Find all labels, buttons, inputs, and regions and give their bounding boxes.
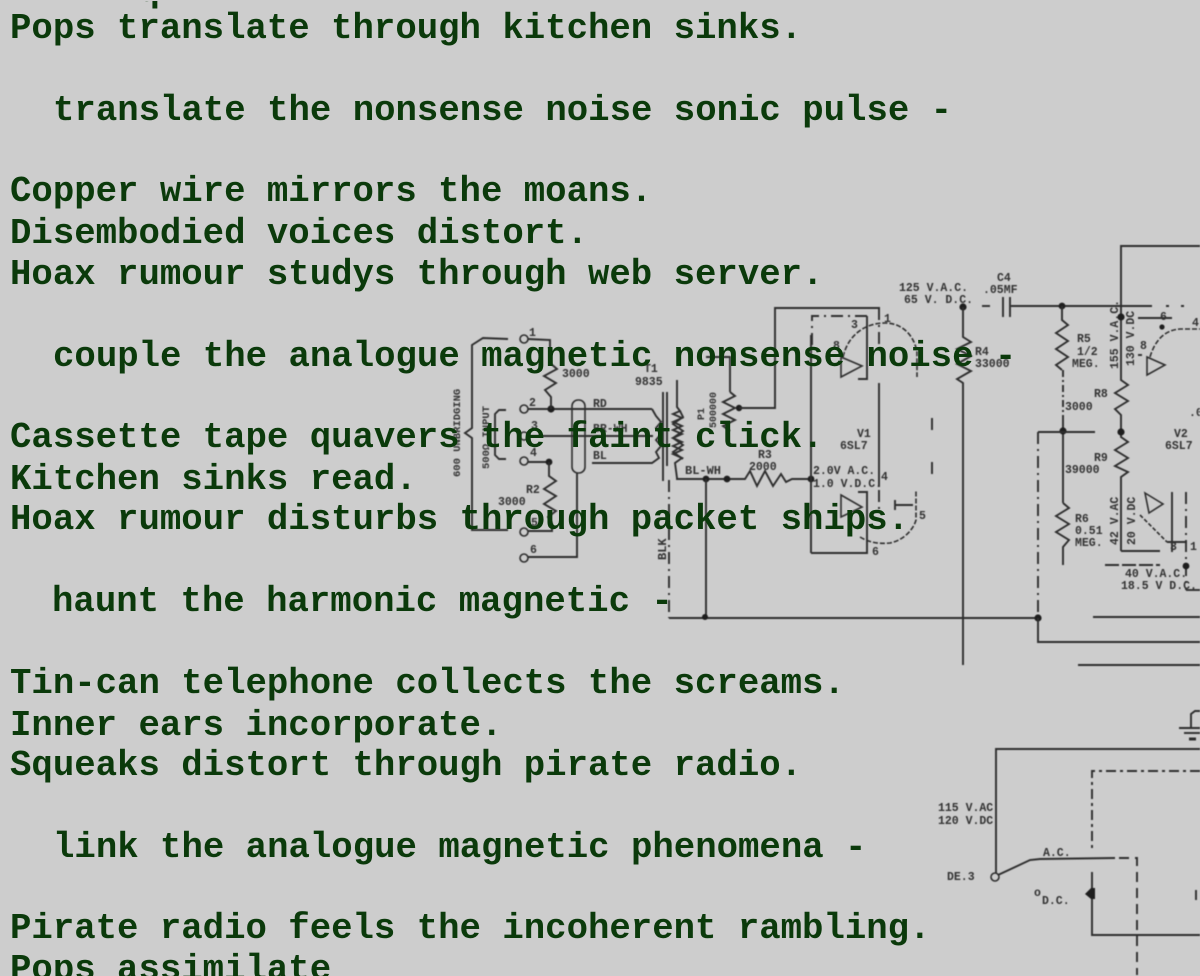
resistors R5 and R6 with bias network: MEG. — [1075, 537, 1103, 550]
tube V1 6SL7: V1 — [857, 428, 871, 441]
resistors R5 and R6 with bias network: R6 — [1075, 513, 1089, 526]
tube V2 6SL7: V2 — [1174, 428, 1188, 441]
power supply switch section: o — [1034, 887, 1041, 900]
stanza 3: Kitchen sinks read. — [10, 459, 417, 500]
resistors R5 and R6 with bias network: R8 — [1094, 388, 1108, 401]
input terminals and brace — [452, 327, 653, 562]
shield and input transformer T1: BLK — [656, 538, 670, 560]
potentiometer P1: P1 — [697, 408, 708, 420]
power supply switch section: D.C. — [1042, 895, 1070, 908]
stanza 2: Disembodied voices distort. — [10, 213, 588, 254]
shield and input transformer T1: 9835 — [635, 376, 663, 389]
shield and input transformer T1: RD — [593, 398, 607, 411]
tube V2 6SL7: 1 — [1190, 541, 1197, 554]
input terminals and brace: 1 — [529, 327, 536, 340]
input resistors R1 and R2: 3000 — [562, 368, 590, 381]
stanza 4: Squeaks distort through pirate radio. — [10, 745, 802, 786]
power supply switch section: 115 V.AC — [938, 802, 993, 815]
power supply switch section: DE.3 — [947, 871, 975, 884]
stanza 5: Pirate radio feels the incoherent rambling. — [10, 908, 930, 949]
resistors R5 and R6 with bias network: 1/2 — [1077, 346, 1098, 359]
plate supply resistors R8 and R9: 42 V.AC — [1109, 497, 1122, 545]
tube V1 6SL7: 1 — [884, 313, 891, 326]
input terminals and brace: 3 — [531, 420, 538, 433]
power supply switch section: 120 V.DC — [938, 815, 993, 828]
resistor R4 and capacitor C4: 33000 — [975, 358, 1010, 371]
resistors R5 and R6 with bias network: R5 — [1077, 333, 1091, 346]
shield and input transformer T1: T1 — [644, 363, 658, 376]
stanza 4: Tin-can telephone collects the screams. — [10, 663, 845, 704]
resistor R4 and capacitor C4: R4 — [975, 346, 989, 359]
tube V2 6SL7: 40 V.A.C. — [1125, 568, 1187, 581]
tube V1 6SL7: 2.0V A.C. — [813, 465, 875, 478]
resistor R4 and capacitor C4: 125 V.A.C. — [899, 282, 968, 295]
tube V1 6SL7: 4 — [881, 471, 888, 484]
input terminals and brace: 5 — [531, 517, 538, 530]
input terminals and brace: 500Ω INPUT — [481, 406, 493, 469]
resistors R5 and R6 with bias network — [1034, 303, 1200, 665]
plate supply resistors R8 and R9: 20 V.DC — [1126, 497, 1139, 545]
potentiometer P1: 500000 — [709, 392, 720, 428]
potentiometer P1 — [697, 308, 880, 431]
resistors R5 and R6 with bias network: 0.51 — [1075, 525, 1103, 538]
power supply switch section: A.C. — [1043, 847, 1071, 860]
input resistors R1 and R2: 3000 — [498, 496, 526, 509]
input terminals and brace: 2 — [529, 397, 536, 410]
tube V2 6SL7: 3 — [1170, 541, 1177, 554]
resistors R5 and R6 with bias network: R9 — [1094, 452, 1108, 465]
input terminals and brace: 4 — [530, 447, 537, 460]
tube V2 6SL7: 6 — [1160, 311, 1167, 324]
tube V2 6SL7 — [1105, 311, 1200, 593]
tube V1 6SL7: 5 — [919, 510, 926, 523]
tube V1 6SL7: 6 — [872, 546, 879, 559]
plate supply resistors R8 and R9: 130 V.DC — [1125, 311, 1138, 366]
shield and input transformer T1: BR-WH — [593, 423, 628, 436]
resistor R4 and capacitor C4: 65 V. D.C. — [904, 294, 973, 307]
input resistors R1 and R2: R2 — [526, 484, 540, 497]
stanza 2: Hoax rumour studys through web server. — [10, 254, 823, 295]
plate supply resistors R8 and R9: 155 V.A.C. — [1109, 300, 1122, 369]
refrain 3: haunt the harmonic magnetic - — [52, 581, 673, 622]
refrain 2: couple the analogue magnetic nonsense noise - — [53, 336, 1016, 377]
tube V1 6SL7: 1.0 V.D.C. — [813, 478, 882, 491]
tube V2 6SL7: 18.5 V D.C. — [1121, 580, 1197, 593]
stanza 4: Inner ears incorporate. — [10, 705, 502, 746]
shield and input transformer T1: BL — [593, 450, 607, 463]
shield and input transformer T1 — [572, 363, 721, 560]
stanza 2: Copper wire mirrors the moans. — [10, 171, 652, 212]
tube V1 6SL7: 6SL7 — [840, 440, 868, 453]
resistor R4 and capacitor C4: .05MF — [983, 284, 1018, 297]
resistors R5 and R6 with bias network: 3000 — [1065, 401, 1093, 414]
tube V1 6SL7 — [811, 308, 932, 559]
refrain 1: translate the nonsense noise sonic pulse - — [53, 90, 952, 131]
tube V2 6SL7: 4 — [1192, 317, 1199, 330]
input terminals and brace: 6 — [530, 544, 537, 557]
resistor R3 and ground bus: R3 — [758, 449, 772, 462]
tube V2 6SL7: 6SL7 — [1165, 440, 1193, 453]
refrain 4: link the analogue magnetic phenomena - — [53, 827, 866, 868]
resistors R5 and R6 with bias network: 39000 — [1065, 464, 1100, 477]
resistor R3 and ground bus: 2000 — [749, 461, 777, 474]
input resistors R1 and R2 — [498, 358, 590, 523]
stanza 3: Cassette tape quavers the faint click. — [10, 417, 823, 458]
plate supply resistors R8 and R9 — [1109, 246, 1200, 551]
stanza 3: Hoax rumour disturbs through packet ships. — [10, 499, 909, 540]
resistor R3 and ground bus — [669, 449, 1038, 620]
resistors R5 and R6 with bias network: MEG. — [1072, 358, 1100, 371]
tube V2 6SL7: 8 — [1140, 340, 1147, 353]
power supply switch section — [938, 711, 1200, 975]
resistor R4 and capacitor C4 — [899, 272, 1185, 665]
resistor R4 and capacitor C4: C4 — [997, 272, 1011, 285]
input terminals and brace: 600 UNBRIDGING — [452, 389, 464, 477]
tube V1 6SL7: 3 — [851, 319, 858, 332]
shield and input transformer T1: BL-WH — [685, 464, 721, 478]
tube V1 6SL7: 8 — [833, 340, 840, 353]
line: Pops translate: Pops translate through kitchen sinks. — [10, 8, 802, 49]
